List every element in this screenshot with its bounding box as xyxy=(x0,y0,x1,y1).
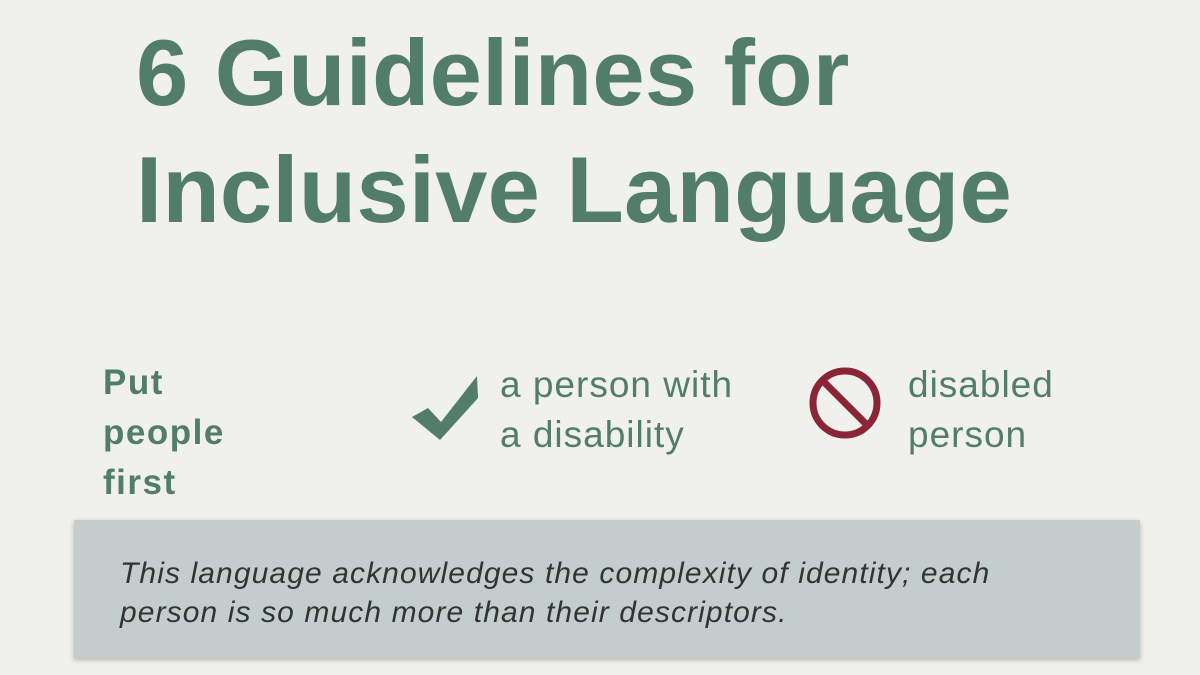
callout text: person is so much more than their descriptors. xyxy=(120,596,788,629)
guideline label: Put xyxy=(103,363,164,402)
don't example: person xyxy=(908,414,1027,455)
icon: checkmark xyxy=(412,376,478,440)
icon: prohibited xyxy=(810,368,880,438)
don't example: disabled xyxy=(908,364,1054,405)
title: 6 Guidelines for xyxy=(136,20,850,125)
callout text xyxy=(119,557,990,629)
do example: a person with xyxy=(500,364,733,405)
callout text: This language acknowledges the complexity of identity; each xyxy=(120,557,990,590)
guideline label xyxy=(103,363,225,502)
guideline label: people xyxy=(103,413,225,452)
guideline label: first xyxy=(103,463,177,502)
do example xyxy=(500,364,733,455)
do example: a disability xyxy=(500,414,685,455)
callout box xyxy=(74,520,1140,658)
title: Inclusive Language xyxy=(136,137,1012,242)
title xyxy=(136,20,1012,242)
don't example xyxy=(908,364,1054,455)
